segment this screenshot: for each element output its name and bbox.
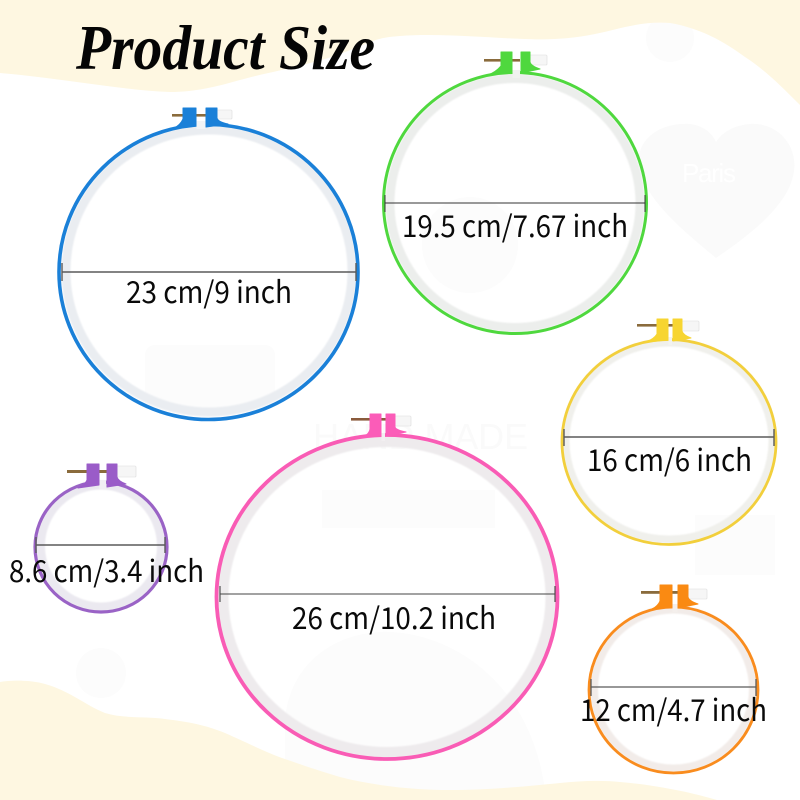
watermark: lower large hoop [285, 632, 545, 800]
hoop: pink 26 cm [216, 414, 558, 759]
clamp gap [382, 433, 385, 441]
hoop: yellow 16 cm [562, 319, 776, 544]
inner ring [66, 130, 352, 412]
clamp tabs [646, 319, 691, 342]
outer rim [589, 607, 758, 773]
inner ring [594, 610, 753, 768]
watermark: top button [646, 14, 694, 62]
outer rim [35, 482, 167, 612]
clamp gap [99, 480, 106, 489]
clamp tabs [361, 414, 406, 438]
watermark: lower button [76, 648, 126, 698]
hoop: green 19.5 cm [384, 52, 646, 334]
background: bottom cream wave [0, 681, 717, 800]
watermark: Paris: Paris [682, 158, 736, 188]
watermark: yarn ball [422, 197, 518, 293]
bolt [67, 470, 107, 473]
screw [116, 466, 136, 477]
measure line [385, 195, 645, 212]
size label: 23 cm/9 inch [126, 268, 292, 312]
screw [216, 110, 232, 119]
outer rim [384, 72, 646, 334]
inner ring [40, 485, 162, 607]
size label: 26 cm/10.2 inch [292, 594, 496, 638]
watermark: heart [639, 124, 794, 258]
clamp tabs [652, 585, 698, 609]
measure line [36, 537, 165, 553]
clamp gap [668, 337, 672, 345]
hoop: purple 8.6 cm [9, 464, 204, 612]
screw [394, 416, 411, 426]
outer rim [562, 340, 776, 544]
hoop: blue 23 cm [59, 108, 358, 420]
watermark: embroidery pattern grid [695, 515, 775, 575]
clamp tabs [172, 108, 228, 129]
watermark: hand made lettering: HAND MADE [313, 416, 528, 457]
inner ring [566, 342, 772, 540]
background: top cream wave [0, 0, 800, 105]
watermark: pin cushion jar [145, 345, 275, 410]
bolt [351, 418, 387, 421]
screw [681, 321, 699, 331]
size label: 12 cm/4.7 inch [580, 686, 767, 730]
measure line [220, 586, 555, 602]
clamp tabs [488, 52, 540, 75]
bolt [637, 324, 673, 327]
clamp gap [672, 604, 678, 612]
watermark: ruler [322, 490, 495, 528]
inner ring [390, 78, 640, 328]
clamp gap [196, 121, 206, 129]
size label: 8.6 cm/3.4 inch [9, 547, 204, 591]
measure line [62, 263, 356, 281]
hoop: orange 12 cm [580, 585, 767, 773]
size label: 19.5 cm/7.67 inch [402, 202, 628, 246]
measure line [564, 429, 774, 446]
outer rim [59, 124, 358, 420]
size label: 16 cm/6 inch [587, 436, 752, 480]
bolt [172, 114, 208, 117]
measure line [591, 679, 756, 696]
screw [529, 55, 547, 65]
bolt [641, 591, 679, 594]
inner ring [223, 442, 551, 752]
screw [688, 589, 707, 599]
bolt [484, 59, 520, 62]
outer rim [216, 435, 558, 759]
clamp tabs [78, 464, 126, 488]
clamp gap [512, 70, 520, 78]
title: Product Size [75, 12, 375, 83]
